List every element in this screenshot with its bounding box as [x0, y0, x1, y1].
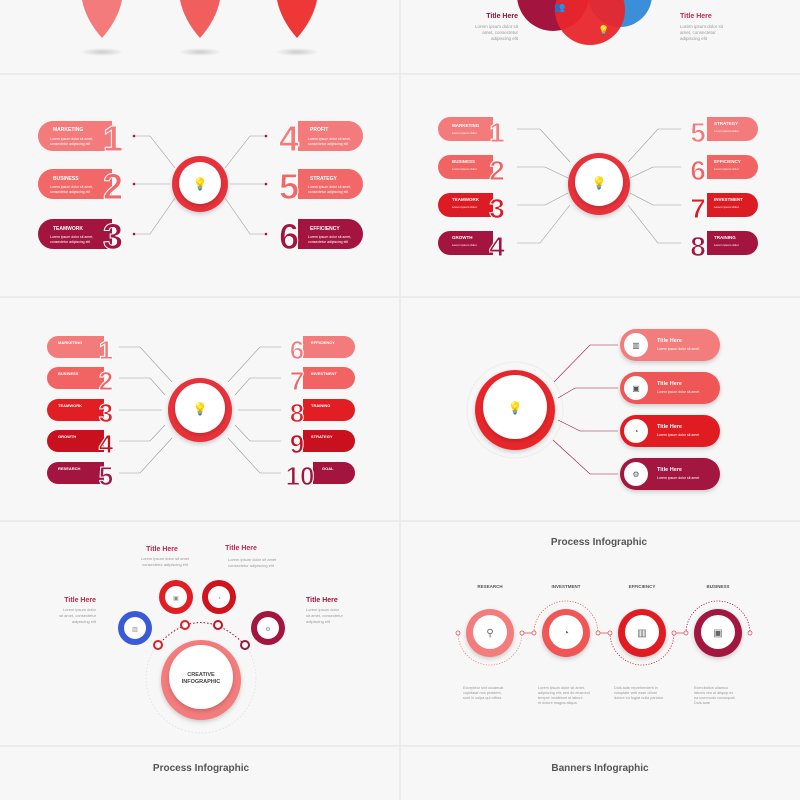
pill 6 [279, 216, 363, 257]
panel: process infographic: et dolore magna aliqua. [538, 701, 578, 705]
pill 5: consectetur adipiscing elit [308, 190, 348, 194]
panel: process infographic: ea commodo consequat. [694, 696, 736, 700]
pill 2: BUSINESS [53, 176, 79, 182]
hub circle: 💡 [193, 177, 207, 191]
panel: 4 banners hub: 💡 [508, 401, 522, 415]
pills left 1-5: 4 [99, 429, 114, 459]
pills right 5-8: Lorem ipsum dolor [714, 129, 739, 133]
pills left 1-5: GROWTH [58, 434, 76, 439]
panel: overlapping circles: Title Here [486, 13, 518, 20]
pill 2: 2 [103, 166, 123, 207]
pill 6: consectetur adipiscing elit [308, 240, 348, 244]
pill 4: Lorem ipsum dolor sit amet, [308, 137, 351, 141]
banner 2: Lorem ipsum dolor sit amet [657, 390, 699, 394]
pills right 6-10: TRAINING [311, 403, 330, 408]
pill 2 [38, 166, 123, 207]
pill 4 [279, 118, 363, 159]
banner 2 [620, 372, 720, 404]
banner 4: ⚙ [632, 470, 640, 479]
pills right 6-10: 6 [290, 335, 304, 365]
panel: creative infographic [59, 545, 344, 733]
pills right 5-8: 8 [690, 231, 706, 262]
pill 1: Lorem ipsum dolor sit amet, [50, 137, 93, 141]
step circles [466, 609, 742, 657]
panel: process infographic: laboris nisi ut aliquip ex [694, 691, 733, 695]
panel: overlapping circles: 💡 [598, 24, 610, 35]
pills right 5-8: EFFICIENCY [714, 159, 741, 164]
panel: process infographic: dolore eu fugiat nulla pariatur. [614, 696, 664, 700]
banner 3: Lorem ipsum dolor sit amet [657, 433, 699, 437]
banner 4: Lorem ipsum dolor sit amet [657, 476, 699, 480]
panel: 6-step hub [38, 118, 363, 257]
pills left 1-4: Lorem ipsum dolor [452, 167, 477, 171]
bubbles [118, 580, 285, 649]
pill 2: consectetur adipiscing elit [50, 190, 90, 194]
pill 3 [38, 216, 123, 257]
pills left 1-4: 3 [489, 193, 505, 224]
panel: 4 banners hub [467, 329, 720, 490]
pills left 1-4: Lorem ipsum dolor [452, 243, 477, 247]
panel: process infographic: cupidatat non proident, [463, 691, 502, 695]
pills left 1-4: MARKETING [452, 123, 480, 128]
pill 5 [279, 166, 363, 207]
pill 2: Lorem ipsum dolor sit amet, [50, 185, 93, 189]
hub circle [172, 156, 228, 212]
pills right 5-8: TRAINING [714, 235, 736, 240]
banner 2: ▣ [632, 384, 640, 393]
banner 1: ▥ [632, 341, 640, 350]
pills left 1-4: 1 [489, 117, 505, 148]
titles [59, 545, 344, 624]
panel: overlapping circles: 👥 [554, 2, 566, 12]
titles: sit amet, consectetur [59, 613, 97, 618]
pills right 6-10: 7 [290, 366, 304, 396]
pill 3: TEAMWORK [53, 226, 83, 232]
pill 5: STRATEGY [310, 176, 338, 182]
pills left 1-4: 2 [489, 155, 505, 186]
pills left 1-5 [47, 335, 114, 491]
step circles: ▥ [637, 628, 647, 639]
panel: process infographic: Duis aute [694, 701, 710, 705]
panel: overlapping circles: amet, consectetur [680, 30, 716, 35]
step circles: ▣ [713, 628, 723, 639]
panel: overlapping circles [475, 0, 724, 45]
pills left 1-4: Lorem ipsum dolor [452, 205, 477, 209]
pill 3: Lorem ipsum dolor sit amet, [50, 235, 93, 239]
banner 3 [620, 415, 720, 447]
pills right 6-10: 8 [290, 398, 304, 428]
banner 4 [620, 458, 720, 490]
panel: process infographic: Exercitation ullamco [694, 686, 728, 690]
pills right 5-8: 6 [690, 155, 706, 186]
panel: process infographic: Process Infographic [551, 537, 648, 548]
pills left 1-5: RESEARCH [58, 466, 81, 471]
pills right 6-10: 10 [286, 461, 314, 491]
pills right 5-8: STRATEGY [714, 121, 738, 126]
titles: adipiscing elit [306, 619, 331, 624]
pills left 1-4 [438, 117, 505, 262]
pills left 1-4: Lorem ipsum dolor [452, 131, 477, 135]
panel: process infographic: tempor incididunt ut labore [538, 696, 583, 700]
panel: teardrops [80, 0, 319, 56]
pills right 6-10: 9 [290, 429, 304, 459]
titles: Lorem ipsum dolor sit amet [228, 557, 277, 562]
panel: process infographic [456, 537, 752, 705]
pills right 6-10: INVESTMENT [311, 371, 337, 376]
hub circle: 💡 [193, 402, 207, 416]
panel: process infographic: INVESTMENT [551, 584, 581, 589]
pill 6: EFFICIENCY [310, 226, 340, 232]
pills right 6-10 [286, 335, 355, 491]
pill 3: 3 [103, 216, 123, 257]
banner 1 [620, 329, 720, 361]
pill 5: 5 [279, 166, 299, 207]
pills right 5-8: 7 [690, 193, 706, 224]
pills left 1-5: 1 [99, 335, 113, 365]
pills left 1-5: 3 [99, 398, 113, 428]
titles: consectetur adipiscing elit [228, 563, 275, 568]
panel: overlapping circles: amet, consectetur [482, 30, 518, 35]
pills right 5-8 [690, 117, 758, 262]
pills left 1-5: TEAMWORK [58, 403, 82, 408]
footer title: process: Process Infographic [153, 763, 250, 774]
pill 1: consectetur adipiscing elit [50, 142, 90, 146]
panel: 10-step hub [47, 335, 355, 491]
panel: process infographic: sunt in culpa qui officia [463, 696, 502, 700]
pills right 5-8: Lorem ipsum dolor [714, 205, 739, 209]
pills right 5-8: INVESTMENT [714, 197, 743, 202]
pill 5: Lorem ipsum dolor sit amet, [308, 185, 351, 189]
pills left 1-5: 2 [99, 366, 113, 396]
panel: process infographic: Lorem ipsum dolor sit amet, [538, 686, 585, 690]
pills left 1-4: 4 [489, 231, 505, 262]
titles: sit amet, consectetur [306, 613, 344, 618]
banner 3: Title Here [657, 424, 682, 430]
banner 2: Title Here [657, 381, 682, 387]
pills right 6-10: STRATEGY [311, 434, 333, 439]
hub circle [168, 378, 232, 442]
pill 1 [38, 118, 123, 159]
bubbles: ▣ [173, 596, 179, 602]
pills right 5-8: Lorem ipsum dolor [714, 243, 739, 247]
pills left 1-4: TEAMWORK [452, 197, 480, 202]
pill 4: 4 [279, 118, 299, 159]
pill 6: Lorem ipsum dolor sit amet, [308, 235, 351, 239]
titles: adipiscing elit [72, 619, 97, 624]
pills left 1-5: 5 [99, 461, 113, 491]
panel: overlapping circles: Lorem ipsum dolor sit [680, 24, 724, 29]
pill 1: MARKETING [53, 127, 83, 133]
panel: process infographic: adipiscing elit, sed do eiusmod [538, 691, 590, 695]
panel: process infographic: voluptate velit esse cillum [614, 691, 657, 695]
titles: Lorem ipsum dolor [63, 607, 97, 612]
panel: process infographic: RESEARCH [477, 584, 503, 589]
panel: process infographic: EFFICIENCY [629, 584, 655, 589]
pill 1: 1 [103, 118, 123, 159]
pills left 1-5: BUSINESS [58, 371, 79, 376]
bubbles: ◔ [217, 596, 221, 602]
pill 6: 6 [279, 216, 299, 257]
titles: consectetur adipiscing elit [142, 562, 189, 567]
titles: Title Here [64, 597, 96, 604]
titles: Title Here [225, 545, 257, 552]
pill 4: PROFIT [310, 127, 328, 133]
panel: process infographic: BUSINESS [706, 584, 730, 589]
titles: Title Here [306, 597, 338, 604]
panel: overlapping circles: adipiscing elit [680, 36, 708, 41]
banner 4: Title Here [657, 467, 682, 473]
pills right 6-10: GOAL [322, 466, 334, 471]
pills right 5-8: 5 [690, 117, 706, 148]
panel: overlapping circles: Lorem ipsum dolor sit [475, 24, 519, 29]
pills left 1-4: BUSINESS [452, 159, 475, 164]
hub circle [568, 153, 630, 215]
panel: overlapping circles: Title Here [680, 13, 712, 20]
pills left 1-5: MARKETING [58, 340, 82, 345]
pills right 6-10: EFFICIENCY [311, 340, 335, 345]
banner 1: Title Here [657, 338, 682, 344]
panel: process infographic: Excepteur sint occaecat [463, 686, 504, 690]
footer title: banners: Banners Infographic [551, 763, 649, 774]
bubbles: ⚙ [265, 626, 271, 633]
hub circle: 💡 [592, 176, 606, 190]
pills left 1-4: GROWTH [452, 235, 472, 240]
banner 3: ◔ [634, 427, 639, 436]
titles: Title Here [146, 546, 178, 553]
step circles: ⚲ [486, 628, 494, 639]
banner 1: Lorem ipsum dolor sit amet [657, 347, 699, 351]
pill 4: consectetur adipiscing elit [308, 142, 348, 146]
pills right 5-8: Lorem ipsum dolor [714, 167, 739, 171]
pill 3: consectetur adipiscing elit [50, 240, 90, 244]
panel: 8-step hub [438, 117, 758, 262]
panel: creative infographic: INFOGRAPHIC [182, 679, 220, 685]
bubbles: ▥ [132, 627, 138, 633]
step circles: ◔ [563, 628, 569, 639]
titles: Lorem ipsum dolor sit amet [141, 556, 190, 561]
panel: overlapping circles: adipiscing elit [491, 36, 519, 41]
titles: Lorem ipsum dolor [306, 607, 340, 612]
panel: process infographic: Duis aute reprehenderit in [614, 686, 658, 690]
panel: creative infographic: CREATIVE [187, 672, 215, 678]
